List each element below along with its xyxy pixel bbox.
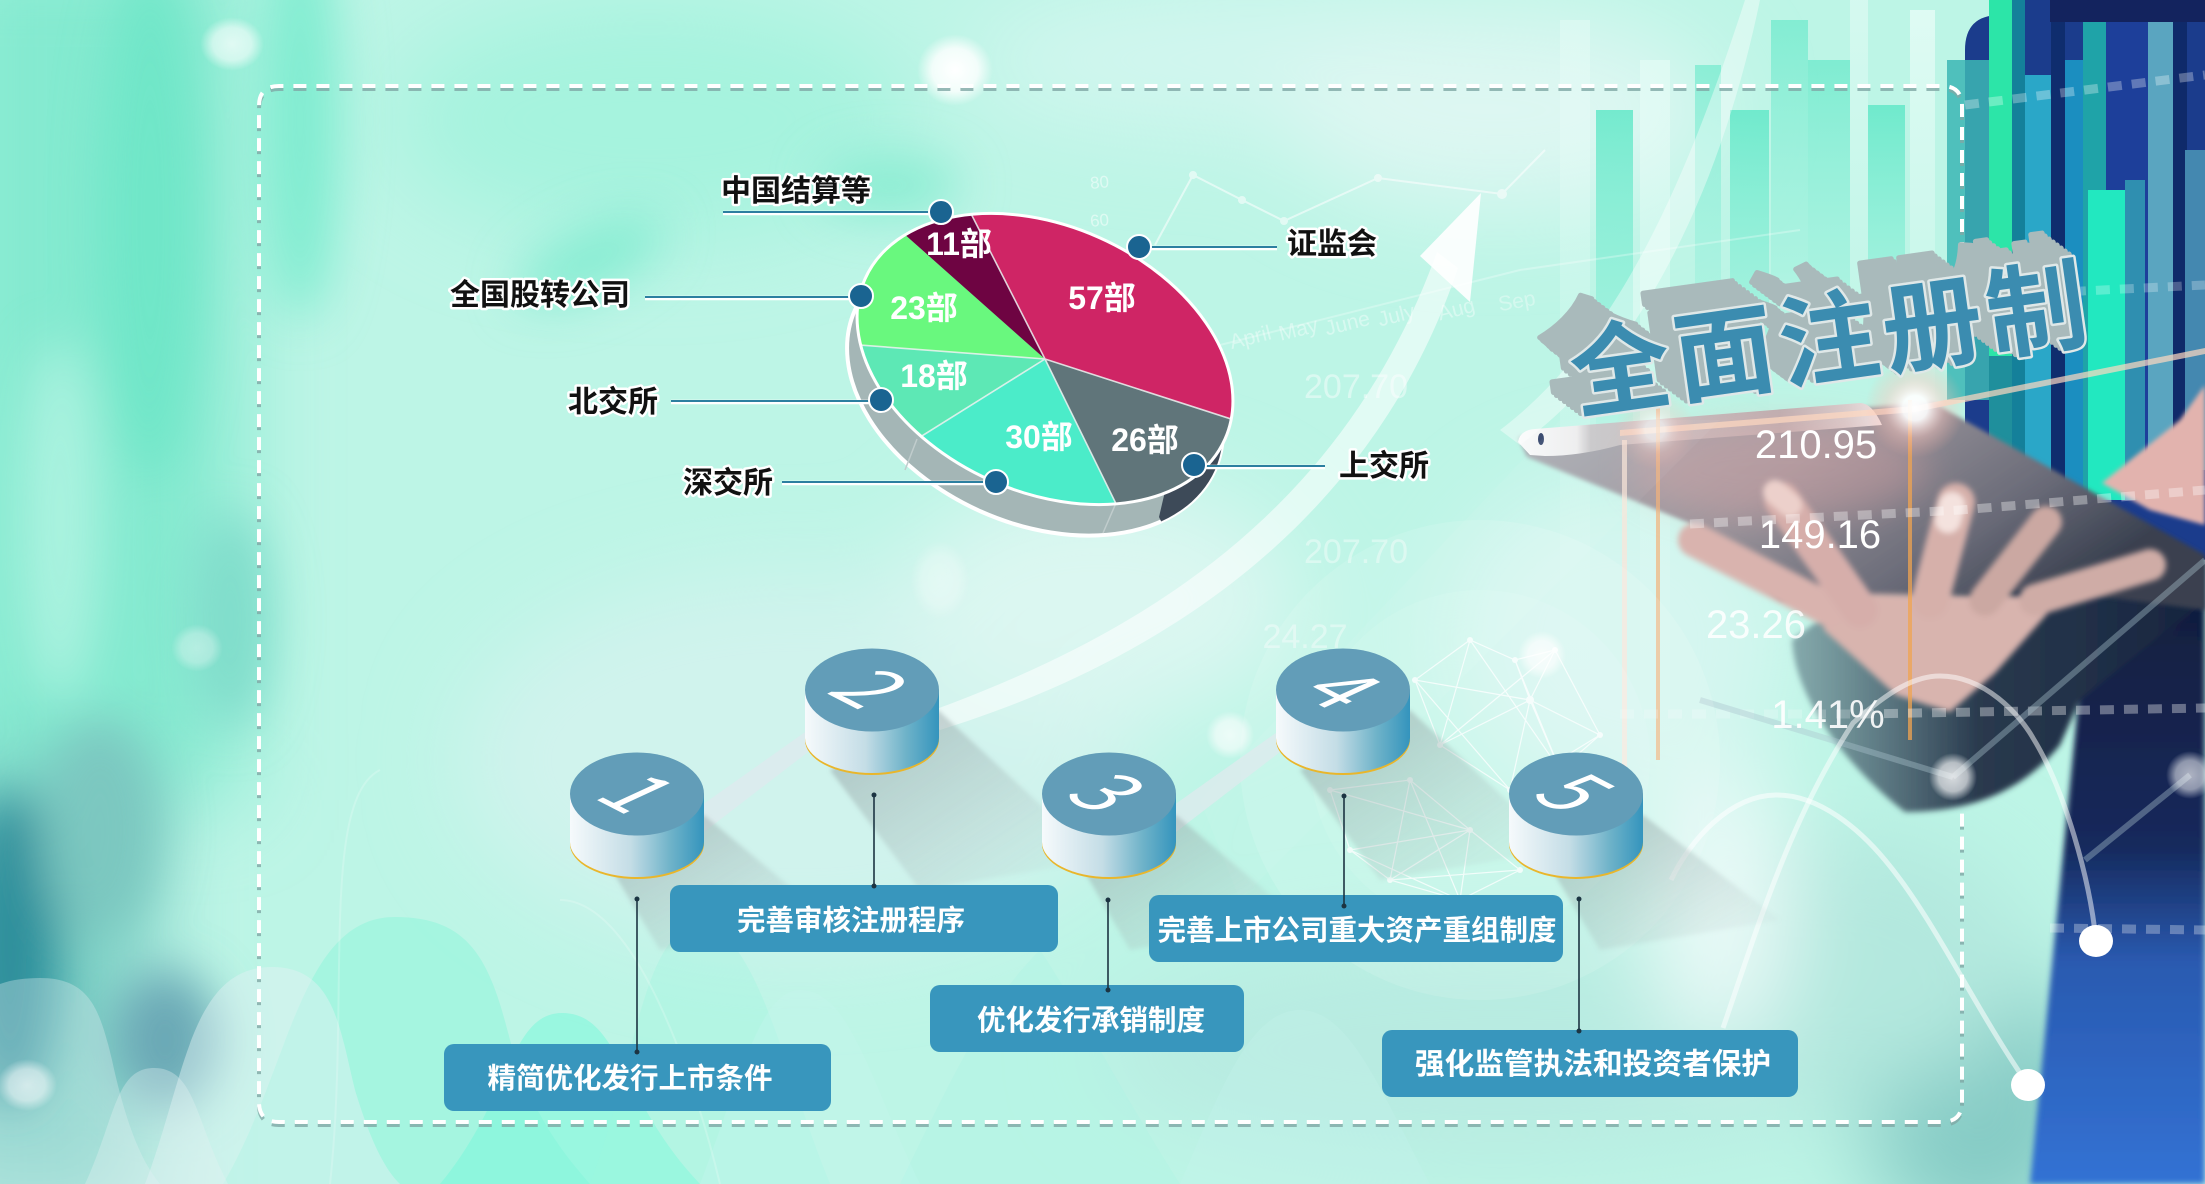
dotted data lines over photo: [1620, 75, 2205, 930]
callout: 深交所: 深交所: [683, 467, 773, 500]
title: 全面注册制 with 3D extrusion: 全面注册制: [1563, 250, 2094, 433]
photo: dark panel with blue and green data bars: [1947, 0, 2205, 560]
faded chart axis labels and months: Sep: [1496, 287, 1537, 316]
step cylinder 3: 3: [1039, 755, 1186, 825]
connector line 2: [872, 792, 876, 888]
faded chart axis labels and months: [1089, 172, 1537, 656]
callout: 北交所: 北交所: [568, 386, 658, 419]
pie value labels: 18部: [900, 358, 968, 394]
faint line chart: [1155, 150, 1800, 350]
tablet numbers: [1706, 423, 1885, 737]
light streaks and lens flare: [1615, 348, 2205, 780]
dashed frame: [259, 86, 1962, 1125]
photo: hand holding tablet: [1695, 492, 2150, 712]
faded chart axis labels and months: 207.70: [1304, 368, 1408, 406]
photo: suit sleeve and shirt: [1792, 560, 2205, 1184]
connector line 4: [1342, 794, 1346, 908]
step box 1: 精简优化发行上市条件: 精简优化发行上市条件: [487, 1063, 773, 1095]
tablet numbers: 23.26: [1706, 603, 1806, 647]
step cylinder 5: [1506, 752, 1653, 879]
callout: 北交所: [568, 386, 893, 419]
connector line 3: [1106, 898, 1110, 992]
callout: 证监会: 证监会: [1287, 228, 1377, 261]
callout: 全国股转公司: [450, 279, 873, 312]
step box 2: 完善审核注册程序: [670, 885, 1058, 952]
step box 2: 完善审核注册程序: 完善审核注册程序: [737, 905, 965, 937]
pie value labels: [890, 226, 1179, 458]
faded chart axis labels and months: 60: [1089, 210, 1110, 231]
photo: tablet: [1518, 402, 2205, 610]
faded chart axis labels and months: 207.70: [1304, 533, 1408, 571]
pie value labels: 30部: [1005, 419, 1073, 455]
faded chart axis labels and months: July: [1376, 300, 1418, 331]
faded chart axis labels and months: 80: [1089, 172, 1110, 193]
step cylinder 5: 5: [1506, 755, 1653, 825]
callout: 上交所: [1182, 450, 1429, 483]
step box 3: 优化发行承销制度: 优化发行承销制度: [977, 1005, 1205, 1037]
pie value labels: 57部: [1068, 280, 1136, 316]
pie side wall: [845, 251, 1224, 538]
tablet numbers: 1.41%: [1771, 693, 1885, 737]
tablet numbers: 210.95: [1755, 423, 1877, 467]
step box 5: 强化监管执法和投资者保护: 强化监管执法和投资者保护: [1415, 1048, 1771, 1081]
step box 3: 优化发行承销制度: [930, 985, 1244, 1052]
step cylinder 2: [802, 648, 949, 775]
faded chart axis labels and months: April: [1227, 321, 1274, 354]
arrow: large white rising arrow: [920, 193, 1481, 730]
step box 4: 完善上市公司重大资产重组制度: 完善上市公司重大资产重组制度: [1157, 915, 1557, 947]
callout: 上交所: 上交所: [1339, 450, 1429, 483]
step cylinder 4: 4: [1274, 652, 1421, 722]
background: bokeh lights: [0, 17, 1566, 1111]
step cylinder 4: [1274, 648, 1421, 775]
background: pale data bars: [1560, 0, 1935, 760]
connector line 5: [1576, 896, 1582, 1034]
callout: 中国结算等: [721, 175, 953, 224]
callout: 深交所: [683, 467, 1008, 500]
step box 4: 完善上市公司重大资产重组制度: [1149, 895, 1563, 962]
callout: 中国结算等: 中国结算等: [721, 175, 871, 208]
cylinder shadows: [600, 710, 1780, 950]
photo: second hand at right edge: [2102, 385, 2205, 525]
step box 5: 强化监管执法和投资者保护: [1382, 1030, 1798, 1097]
pie outline: [811, 157, 1279, 561]
step cylinder 3: [1039, 752, 1186, 879]
step cylinder 2: 2: [802, 651, 949, 721]
connector line 1: [634, 896, 640, 1054]
callout: 证监会: [1127, 228, 1377, 261]
pie top wedges: [858, 214, 1232, 504]
bell curves: translucent hills at bottom: [0, 917, 1430, 1184]
faded chart axis labels and months: Aug: [1436, 294, 1477, 325]
translucent rings: [1200, 420, 1720, 1000]
faded chart axis labels and months: 24.27: [1262, 618, 1348, 656]
connector bands between cylinders: [702, 730, 1280, 832]
arrow: secondary rising band: [1500, 0, 1760, 445]
data line nodes on photo: [1700, 560, 2205, 860]
callout: 全国股转公司: 全国股转公司: [450, 279, 630, 312]
step cylinder 1: [569, 752, 716, 879]
faded chart axis labels and months: June: [1323, 307, 1372, 340]
pie value labels: 11部: [926, 226, 992, 262]
white curves with end dots: [330, 676, 2113, 1184]
tablet numbers: 149.16: [1759, 513, 1881, 557]
step cylinder 1: 1: [569, 756, 716, 826]
faded chart axis labels and months: May: [1276, 314, 1321, 346]
panel: pie chart: [845, 212, 1234, 538]
pie value labels: 23部: [890, 290, 958, 326]
step box 1: 精简优化发行上市条件: [444, 1044, 831, 1111]
pie value labels: 26部: [1111, 422, 1179, 458]
network mesh: [1327, 637, 1603, 903]
